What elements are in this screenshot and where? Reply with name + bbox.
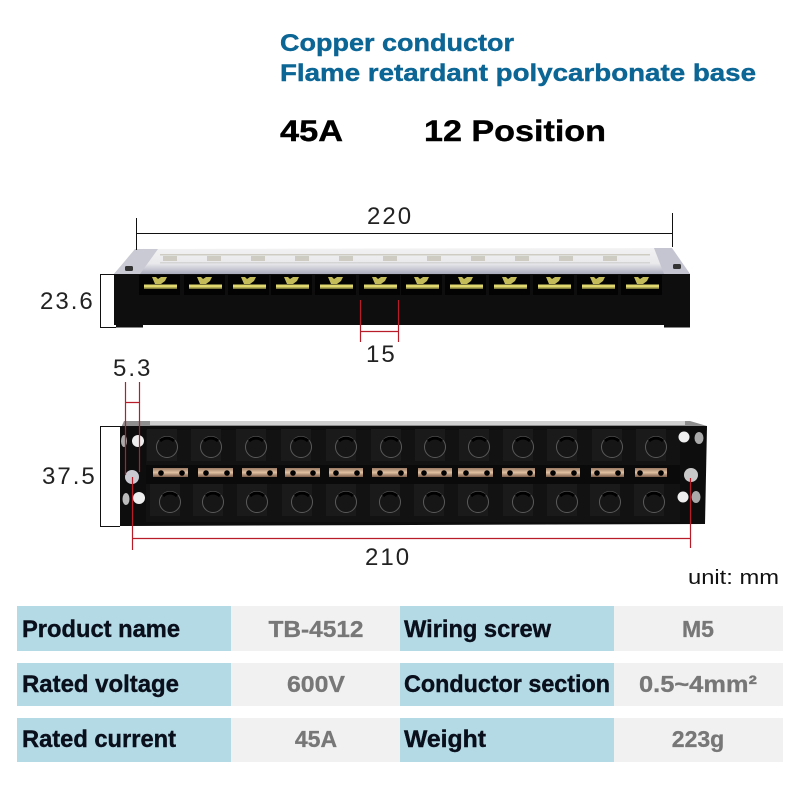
heading: rating and positions: 45A: [280, 115, 343, 148]
dimension: pitch 15: 15: [366, 341, 397, 368]
row: rated voltage and conductor section: [17, 663, 783, 706]
heading: features: [280, 30, 756, 87]
photo: terminal block top view: [120, 421, 707, 526]
row: product name and wiring screw: TB-4512: [268, 616, 364, 642]
heading: features: Copper conductor: [280, 30, 514, 57]
unit note: unit: mm: [688, 567, 779, 589]
row: rated current and weight: 45A: [295, 726, 337, 752]
dimension: width 37.5: 37.5: [42, 463, 97, 490]
row: rated current and weight: [17, 718, 783, 762]
dimension: overall length 220: 220: [367, 203, 413, 230]
row: product name and wiring screw: M5: [682, 616, 714, 642]
row: product name and wiring screw: [17, 606, 783, 651]
dimension: hole spacing 210: 210: [365, 544, 411, 571]
table: specifications: [17, 606, 783, 762]
photo: terminal block front view: [114, 248, 690, 328]
row: rated voltage and conductor section: Rated voltage: [22, 671, 179, 698]
row: product name and wiring screw: Product name: [22, 616, 180, 643]
dimension: overall length 220: [136, 203, 673, 250]
row: rated voltage and conductor section: Conductor section: [404, 671, 610, 698]
dimension: pitch 15: [360, 300, 399, 368]
heading: rating and positions: 12 Position: [424, 115, 606, 148]
row: rated current and weight: Weight: [404, 726, 486, 753]
dimension: mounting hole 5.3: 5.3: [113, 355, 152, 382]
heading: features: Flame retardant polycarbonate base: [280, 60, 756, 87]
row: rated current and weight: 223g: [672, 726, 724, 752]
dimension: hole spacing 210: [132, 477, 691, 571]
row: product name and wiring screw: Wiring screw: [404, 616, 551, 643]
dimension: mounting hole 5.3: [113, 355, 152, 475]
dimension: width 37.5: [42, 426, 120, 526]
dimension: height 23.6: 23.6: [40, 288, 95, 315]
row: rated current and weight: Rated current: [22, 726, 176, 753]
row: rated voltage and conductor section: 0.5~4mm²: [639, 671, 757, 697]
dimension: height 23.6: [40, 274, 116, 328]
row: rated voltage and conductor section: 600V: [287, 671, 346, 697]
heading: rating and positions: [280, 115, 606, 148]
